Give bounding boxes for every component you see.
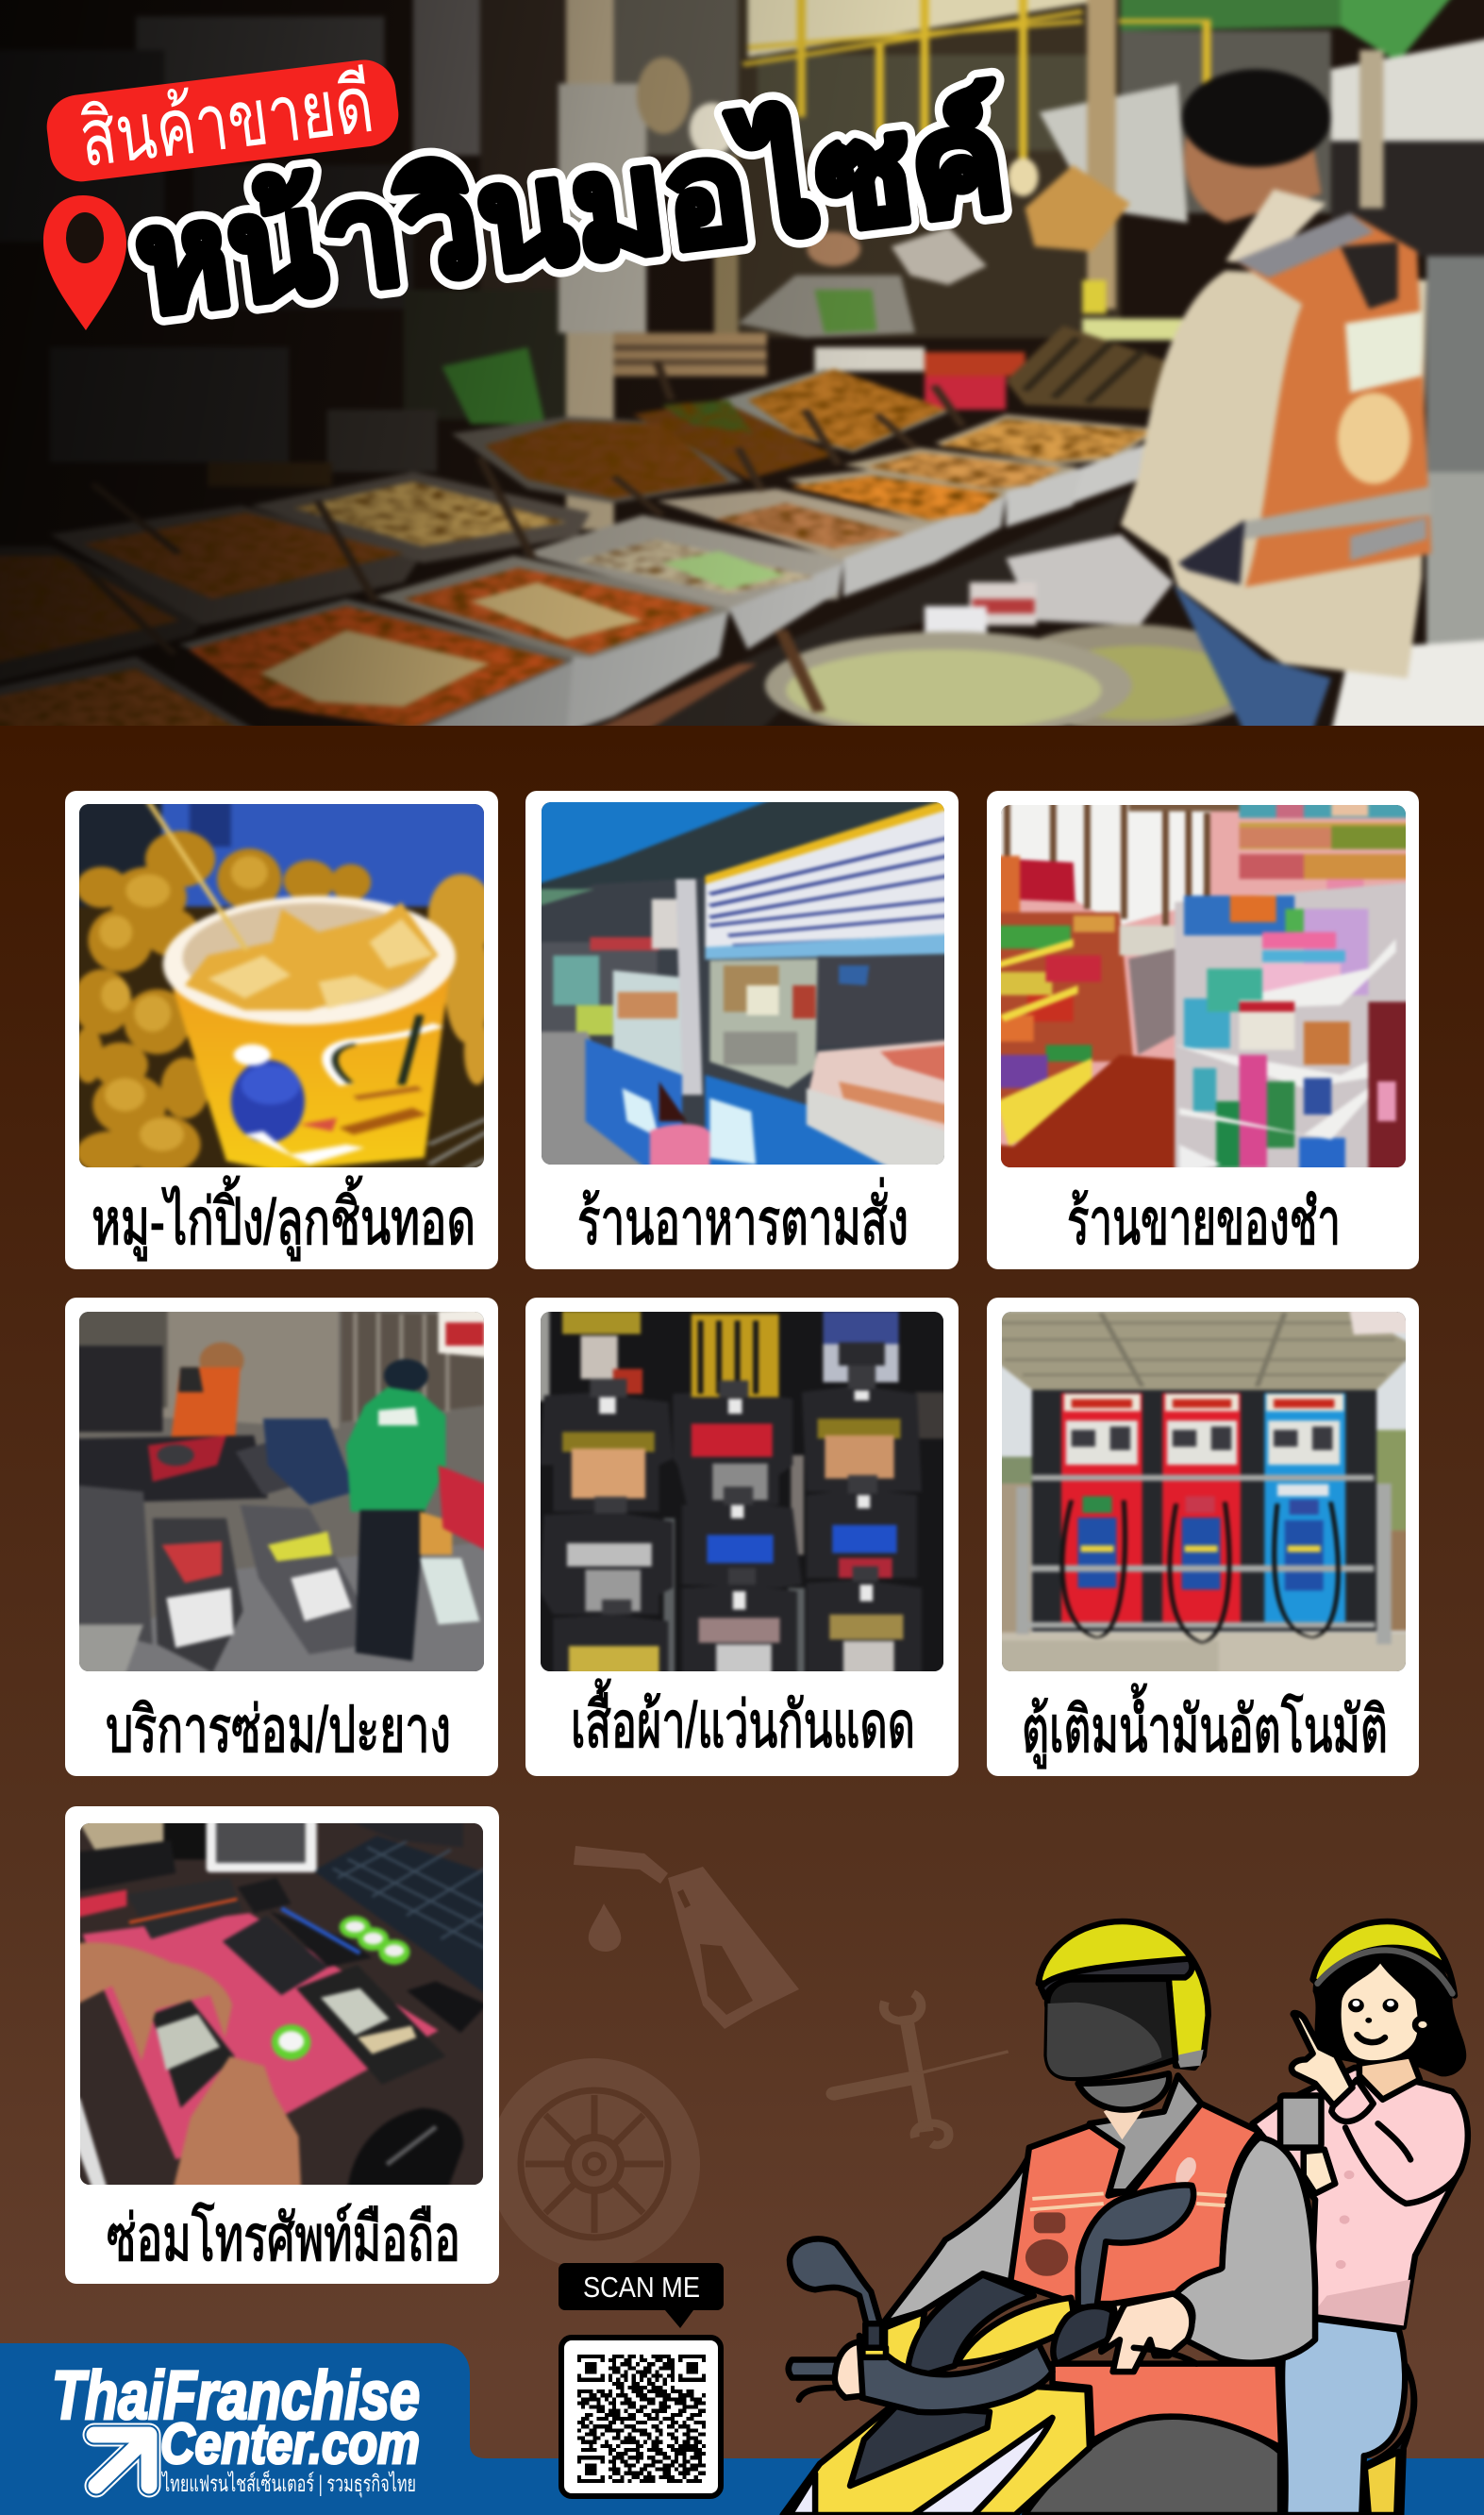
callout: SCAN ME label: SCAN ME <box>583 2271 700 2304</box>
photo: hands repairing phone on pink mat <box>80 1823 483 2185</box>
illustration: motorcycle taxi rider with passenger <box>779 1918 1472 2515</box>
photo: coin fuel pumps <box>1002 1312 1406 1671</box>
icon: tyre wheel <box>489 2058 700 2270</box>
heading: หน้าวินมอไซค์: หน้าวินมอไซค์ <box>127 76 1013 344</box>
passenger: woman in pink shirt <box>1252 1921 1468 2515</box>
callout: SCAN ME label <box>559 2263 724 2328</box>
card: automatic fuel dispenser <box>987 1298 1419 1776</box>
card: repair and tyre service <box>65 1298 498 1776</box>
photo: food stall front <box>542 802 944 1165</box>
card: mobile phone repair <box>65 1806 499 2284</box>
icon: location pin <box>43 195 126 330</box>
photo: hero food stall with motorcycle taxi rider <box>0 0 1484 726</box>
rider: man in orange vest and helmet <box>883 1921 1315 2448</box>
heading: title block with pill and location pin <box>43 59 1013 344</box>
pill: สินค้าขายดี: สินค้าขายดี <box>75 59 378 183</box>
card: grocery shop <box>987 791 1419 1269</box>
icon: logo arrow <box>94 2435 149 2486</box>
photo: motorbikes being repaired <box>79 1312 484 1671</box>
footer: blue logo panel and strip <box>0 2343 1484 2515</box>
card: clothing and sunglasses <box>525 1298 959 1776</box>
heading: หน้าวินมอไซค์: หน้าวินมอไซค์ <box>127 76 1013 344</box>
QR code <box>559 2335 724 2499</box>
photo: fish balls in yellow cup <box>79 804 484 1167</box>
photo: grocery shelves <box>1001 805 1406 1167</box>
photo: Muay Thai t-shirts on wall <box>541 1312 943 1671</box>
icon: fuel nozzle <box>574 1846 799 2029</box>
card: made-to-order food shop <box>525 791 959 1269</box>
pill: สินค้าขายดี <box>43 57 402 187</box>
icon: wrench and screwdriver watermark <box>834 1993 1009 2145</box>
card: grilled pork and fish balls <box>65 791 498 1269</box>
logo: ThaiFranchiseCenter.com <box>52 2358 420 2498</box>
decorative icons: fuel nozzle, drop and wheel watermarks <box>499 1846 799 2264</box>
photo overlay: dark left fade <box>0 0 1484 726</box>
motorcycle: yellow scooter with mirrors <box>783 2185 1280 2515</box>
